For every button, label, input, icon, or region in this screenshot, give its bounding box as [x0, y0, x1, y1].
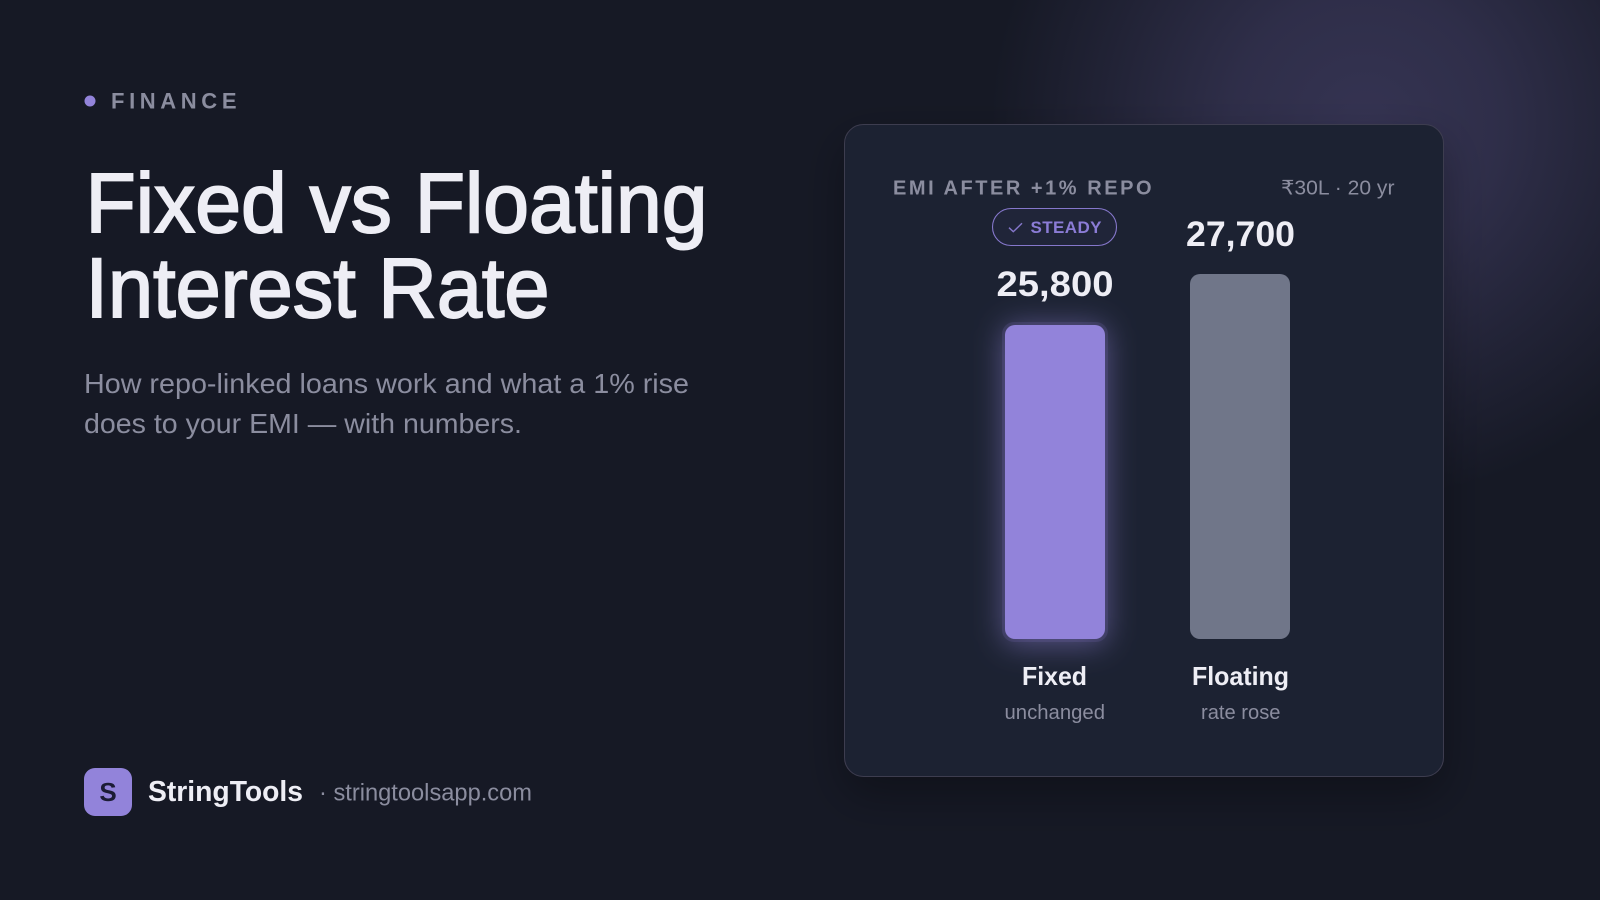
- value: 25,800: 25,800: [996, 265, 1114, 304]
- bar glow: [1003, 325, 1107, 645]
- background glow: [960, 0, 1600, 530]
- brand name: StringTools: [148, 776, 303, 808]
- footer brand: [84, 768, 532, 816]
- eyebrow: finance: FINANCE: [111, 88, 236, 114]
- label: fixed: Fixed: [1022, 661, 1087, 691]
- bar: fixed: [1002, 322, 1108, 642]
- card loan details: ₹30L · 20 yr: [1281, 178, 1395, 200]
- title: Fixed vs Floating: [86, 156, 708, 250]
- card heading: EMI AFTER +1% REPO: [893, 178, 1152, 200]
- icon: logo: [84, 768, 132, 816]
- value: 27,700: 27,700: [1186, 215, 1295, 254]
- icon: logo: S: [99, 777, 117, 807]
- sublabel: rate rose: rate rose: [1201, 702, 1280, 724]
- subtitle: How repo-linked loans work and what a 1% rise: [84, 368, 689, 399]
- title: [86, 156, 708, 335]
- badge: steady: STEADY: [1030, 218, 1102, 237]
- brand url: · stringtoolsapp.com: [319, 780, 532, 806]
- sublabel: unchanged: unchanged: [1004, 702, 1105, 724]
- subtitle: does to your EMI — with numbers.: [84, 408, 522, 439]
- bar group: floating: [1186, 215, 1295, 724]
- subtitle: [84, 368, 689, 439]
- label: floating: Floating: [1192, 661, 1289, 691]
- bar group: fixed: [996, 265, 1114, 724]
- badge: steady: [992, 208, 1116, 246]
- panel: EMI chart card: [844, 124, 1444, 776]
- bar: floating: [1190, 274, 1290, 639]
- title: Interest Rate: [86, 241, 550, 335]
